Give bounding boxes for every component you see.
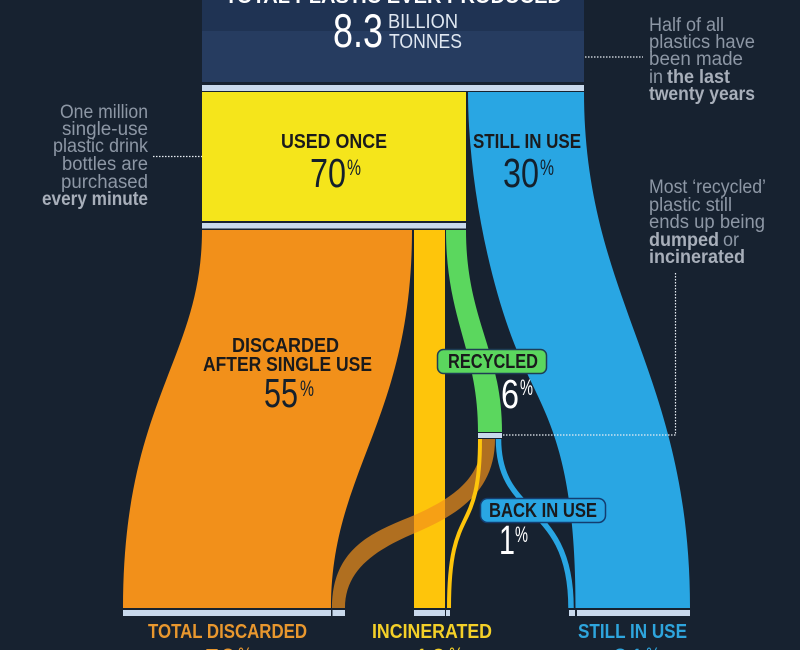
- figure: 8.3 billion tonnes: 8.3: [333, 4, 383, 57]
- flow: still in use (blue): [468, 92, 690, 608]
- label: recycled pill: RECYCLED: [448, 351, 538, 373]
- flow: recycled to incinerated (thin yellow): [449, 439, 480, 608]
- note: half of all plastics: the last: [667, 67, 731, 88]
- label: incinerated: [372, 621, 492, 650]
- note: half of all plastics: been made: [649, 49, 743, 70]
- note: single-use bottles: [42, 102, 148, 210]
- label: incinerated: INCINERATED: [372, 621, 492, 643]
- flow: incinerated (yellow): [414, 230, 445, 608]
- figure: back in use 1%: 1: [499, 517, 515, 563]
- note: half of all plastics: [649, 15, 755, 105]
- flow: recycled to discarded (brown): [332, 439, 495, 608]
- label: still in use total: [578, 621, 687, 650]
- note: single-use bottles: bottles are: [62, 154, 148, 175]
- note: half of all plastics: plastics have: [649, 32, 755, 53]
- note: single-use bottles: plastic drink: [53, 136, 148, 157]
- note: single-use bottles: single-use: [62, 119, 148, 140]
- label: still in use 30%: 30: [503, 150, 539, 196]
- label: total discarded: TOTAL DISCARDED: [148, 621, 307, 643]
- note: most recycled plastic: [649, 177, 766, 268]
- note: most recycled plastic: ends up being: [649, 212, 765, 233]
- figure: recycled 6%: 6: [501, 371, 519, 417]
- label: discarded after single use 55%: DISCARDED: [232, 335, 339, 357]
- note: half of all plastics: Half of all: [649, 15, 724, 36]
- note: half of all plastics: in: [649, 67, 663, 88]
- note: single-use bottles: One million: [60, 102, 148, 123]
- label: still in use 30%: %: [540, 155, 554, 180]
- label: still in use 30%: STILL IN USE: [473, 131, 581, 153]
- label: discarded after single use 55%: 55: [264, 370, 298, 416]
- figure: recycled 6%: %: [520, 375, 533, 400]
- bar: recycled splitter: [478, 433, 502, 438]
- label: still in use 30%: [473, 131, 581, 196]
- label: discarded after single use 55%: %: [300, 376, 314, 401]
- note: most recycled plastic: incinerated: [649, 247, 745, 268]
- figure: back in use 1%: %: [515, 522, 528, 547]
- note: most recycled plastic: dumped: [649, 230, 719, 251]
- figure: 8.3 billion tonnes: BILLION: [388, 11, 458, 33]
- note: most recycled plastic: plastic still: [649, 195, 732, 216]
- panel: total plastic ever produced: [202, 0, 584, 91]
- label: discarded after single use 55%: AFTER SINGLE USE: [203, 354, 372, 376]
- note: most recycled plastic: or: [723, 230, 740, 251]
- bars: bottom totals: [123, 610, 690, 616]
- figure: 8.3 billion tonnes: [333, 4, 462, 57]
- label: discarded after single use 55%: [203, 335, 372, 416]
- note: half of all plastics: twenty years: [649, 84, 755, 105]
- label: back in use pill: BACK IN USE: [489, 500, 597, 522]
- flow: recycled back in use (thin blue): [498, 439, 571, 608]
- block: used once (yellow): [202, 92, 466, 221]
- note: most recycled plastic: Most ‘recycled’: [649, 177, 766, 198]
- label: used once 70%: USED ONCE: [281, 131, 387, 153]
- flow: discarded after single use (orange): [123, 230, 412, 608]
- label: used once 70%: %: [347, 155, 361, 180]
- label: used once 70%: [281, 131, 387, 196]
- label: used once 70%: 70: [310, 150, 346, 196]
- label: total discarded: [148, 621, 307, 650]
- figure: 8.3 billion tonnes: TONNES: [389, 31, 462, 53]
- note: single-use bottles: purchased: [61, 172, 148, 193]
- bar: used once splitter: [202, 223, 466, 228]
- label: still in use total: STILL IN USE: [578, 621, 687, 643]
- note: single-use bottles: every minute: [42, 189, 148, 210]
- flow: recycled (green): [446, 230, 502, 432]
